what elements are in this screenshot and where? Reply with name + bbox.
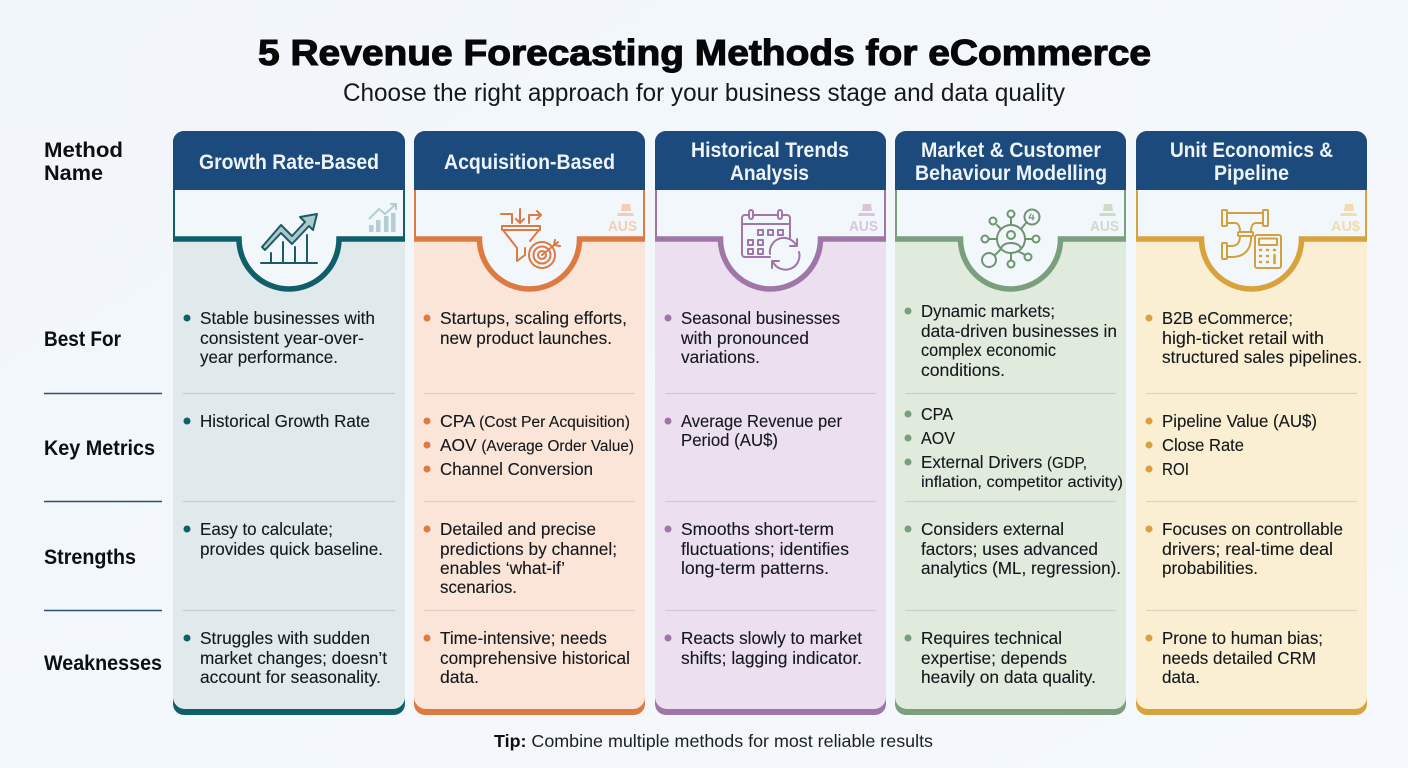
strengths: factors; uses advanced bbox=[921, 539, 1098, 559]
header: market and customer behaviour modelling: Market & Customer bbox=[921, 139, 1101, 162]
row label: method name bbox=[44, 139, 123, 185]
icon: funnel and target bbox=[501, 209, 560, 268]
icon: pipes and calculator bbox=[1222, 210, 1281, 268]
weaknesses: data. bbox=[440, 667, 479, 687]
key metrics: External Drivers (GDP, bbox=[921, 452, 1087, 472]
icon: calendar with refresh arrows bbox=[742, 210, 799, 270]
strengths: Easy to calculate; bbox=[200, 519, 333, 539]
best for bbox=[424, 308, 627, 348]
weaknesses bbox=[424, 628, 630, 687]
weaknesses: Struggles with sudden bbox=[200, 628, 370, 648]
weaknesses: needs detailed CRM bbox=[1162, 648, 1316, 668]
icon: customer network bbox=[982, 210, 1040, 268]
key metrics: Period (AU$) bbox=[681, 430, 778, 450]
strengths bbox=[664, 519, 849, 578]
best for: data-driven businesses in bbox=[921, 321, 1117, 341]
best for: variations. bbox=[681, 347, 760, 367]
title: 5 Revenue Forecasting Methods for eCommerce bbox=[258, 32, 1151, 73]
best for: Dynamic markets; bbox=[921, 301, 1055, 321]
icon: AUS watermark: AUS bbox=[849, 219, 878, 235]
strengths: provides quick baseline. bbox=[200, 539, 383, 559]
best for: high-ticket retail with bbox=[1162, 328, 1324, 348]
best for bbox=[904, 301, 1117, 380]
key metrics: Close Rate bbox=[1162, 435, 1244, 455]
panel: historical trends analysis bbox=[655, 131, 886, 715]
best for: B2B eCommerce; bbox=[1162, 308, 1293, 328]
weaknesses: Requires technical bbox=[921, 628, 1062, 648]
strengths: Considers external bbox=[921, 519, 1064, 539]
header: historical trends analysis: Analysis bbox=[730, 162, 809, 185]
strengths bbox=[424, 519, 617, 597]
icon: growth chart with arrow bbox=[261, 214, 317, 263]
icon: AU$ watermark bbox=[1331, 204, 1360, 235]
strengths: drivers; real-time deal bbox=[1162, 539, 1333, 559]
header: historical trends analysis bbox=[691, 139, 849, 185]
weaknesses: Time-intensive; needs bbox=[440, 628, 607, 648]
row label: method name: Name bbox=[44, 162, 103, 185]
strengths: Detailed and precise bbox=[440, 519, 596, 539]
key metrics: CPA (Cost Per Acquisition) bbox=[440, 411, 630, 431]
best for: conditions. bbox=[921, 360, 1005, 380]
weaknesses bbox=[664, 628, 862, 668]
best for bbox=[184, 308, 375, 367]
row labels bbox=[44, 139, 162, 675]
key metrics: inflation, competitor activity) bbox=[921, 474, 1123, 491]
best for: new product launches. bbox=[440, 328, 612, 348]
strengths bbox=[904, 519, 1121, 578]
header: market and customer behaviour modelling: Behaviour Modelling bbox=[915, 162, 1107, 185]
row label: strengths: Strengths bbox=[44, 546, 136, 569]
icon: AUS watermark bbox=[1090, 204, 1119, 235]
header: acquisition-based: Acquisition-Based bbox=[444, 151, 615, 174]
key metrics: AOV (Average Order Value) bbox=[440, 435, 634, 455]
row label: weaknesses: Weaknesses bbox=[44, 652, 162, 675]
row label: method name: Method bbox=[44, 139, 123, 162]
best for: Stable businesses with bbox=[200, 308, 375, 328]
key metrics bbox=[904, 404, 1123, 491]
panel: market and customer behaviour modelling bbox=[895, 131, 1126, 715]
weaknesses: heavily on data quality. bbox=[921, 667, 1096, 687]
weaknesses: market changes; doesn’t bbox=[200, 648, 387, 668]
strengths: scenarios. bbox=[440, 577, 517, 597]
key metrics: Channel Conversion bbox=[440, 459, 593, 479]
weaknesses: Reacts slowly to market bbox=[681, 628, 862, 648]
best for: Seasonal businesses bbox=[681, 308, 840, 328]
key metrics: Historical Growth Rate bbox=[200, 411, 370, 431]
weaknesses: Prone to human bias; bbox=[1162, 628, 1323, 648]
strengths: fluctuations; identifies bbox=[681, 539, 849, 559]
key metrics: Pipeline Value (AU$) bbox=[1162, 411, 1317, 431]
header: unit economics and pipeline bbox=[1170, 139, 1333, 185]
strengths: Focuses on controllable bbox=[1162, 519, 1343, 539]
best for: with pronounced bbox=[680, 328, 809, 348]
header: unit economics and pipeline: Pipeline bbox=[1214, 162, 1289, 185]
weaknesses bbox=[184, 628, 387, 687]
icon: AUS watermark: AUS bbox=[608, 219, 637, 235]
key metrics bbox=[424, 411, 634, 479]
weaknesses bbox=[1146, 628, 1323, 687]
weaknesses: comprehensive historical bbox=[440, 648, 630, 668]
best for: structured sales pipelines. bbox=[1162, 347, 1362, 367]
tip footer: Tip: Combine multiple methods for most reliable results bbox=[494, 731, 933, 751]
key metrics bbox=[664, 411, 842, 450]
strengths: predictions by channel; bbox=[440, 539, 617, 559]
strengths bbox=[1146, 519, 1343, 578]
weaknesses: shifts; lagging indicator. bbox=[681, 648, 862, 668]
header: historical trends analysis: Historical Trends bbox=[691, 139, 849, 162]
header: market and customer behaviour modelling bbox=[915, 139, 1107, 185]
best for bbox=[664, 308, 840, 367]
row label: best for: Best For bbox=[44, 328, 121, 351]
header: unit economics and pipeline: Unit Economics & bbox=[1170, 139, 1333, 162]
icon: AUS watermark bbox=[608, 204, 637, 235]
strengths: Smooths short-term bbox=[681, 519, 834, 539]
best for bbox=[1146, 308, 1362, 367]
key metrics: Average Revenue per bbox=[681, 411, 842, 431]
weaknesses: expertise; depends bbox=[921, 648, 1067, 668]
weaknesses bbox=[904, 628, 1096, 687]
row label: key metrics: Key Metrics bbox=[44, 437, 155, 460]
strengths: analytics (ML, regression). bbox=[921, 558, 1121, 578]
strengths bbox=[184, 519, 383, 559]
icon: AUS watermark: AUS bbox=[1090, 219, 1119, 235]
key metrics: AOV bbox=[921, 428, 955, 448]
panel: growth rate-based bbox=[173, 131, 405, 715]
best for: complex economic bbox=[921, 340, 1056, 360]
key metrics: ROI bbox=[1162, 459, 1189, 479]
header: growth rate-based: Growth Rate-Based bbox=[199, 151, 379, 174]
key metrics: CPA bbox=[921, 404, 953, 424]
icon: AU$ watermark: AU$ bbox=[1331, 219, 1360, 235]
strengths: long-term patterns. bbox=[681, 558, 829, 578]
icon: watermark chart bbox=[369, 204, 396, 232]
key metrics bbox=[1146, 411, 1317, 479]
subtitle: Choose the right approach for your business stage and data quality bbox=[343, 79, 1065, 107]
icon: AUS watermark bbox=[849, 204, 878, 235]
panel: unit economics and pipeline bbox=[1136, 131, 1367, 715]
panel: acquisition-based bbox=[414, 131, 645, 715]
best for: consistent year-over- bbox=[200, 328, 364, 348]
best for: year performance. bbox=[200, 347, 338, 367]
weaknesses: account for seasonality. bbox=[200, 667, 381, 687]
best for: Startups, scaling efforts, bbox=[440, 308, 627, 328]
strengths: probabilities. bbox=[1162, 558, 1258, 578]
strengths: enables ‘what-if’ bbox=[440, 558, 565, 578]
weaknesses: data. bbox=[1162, 667, 1200, 687]
